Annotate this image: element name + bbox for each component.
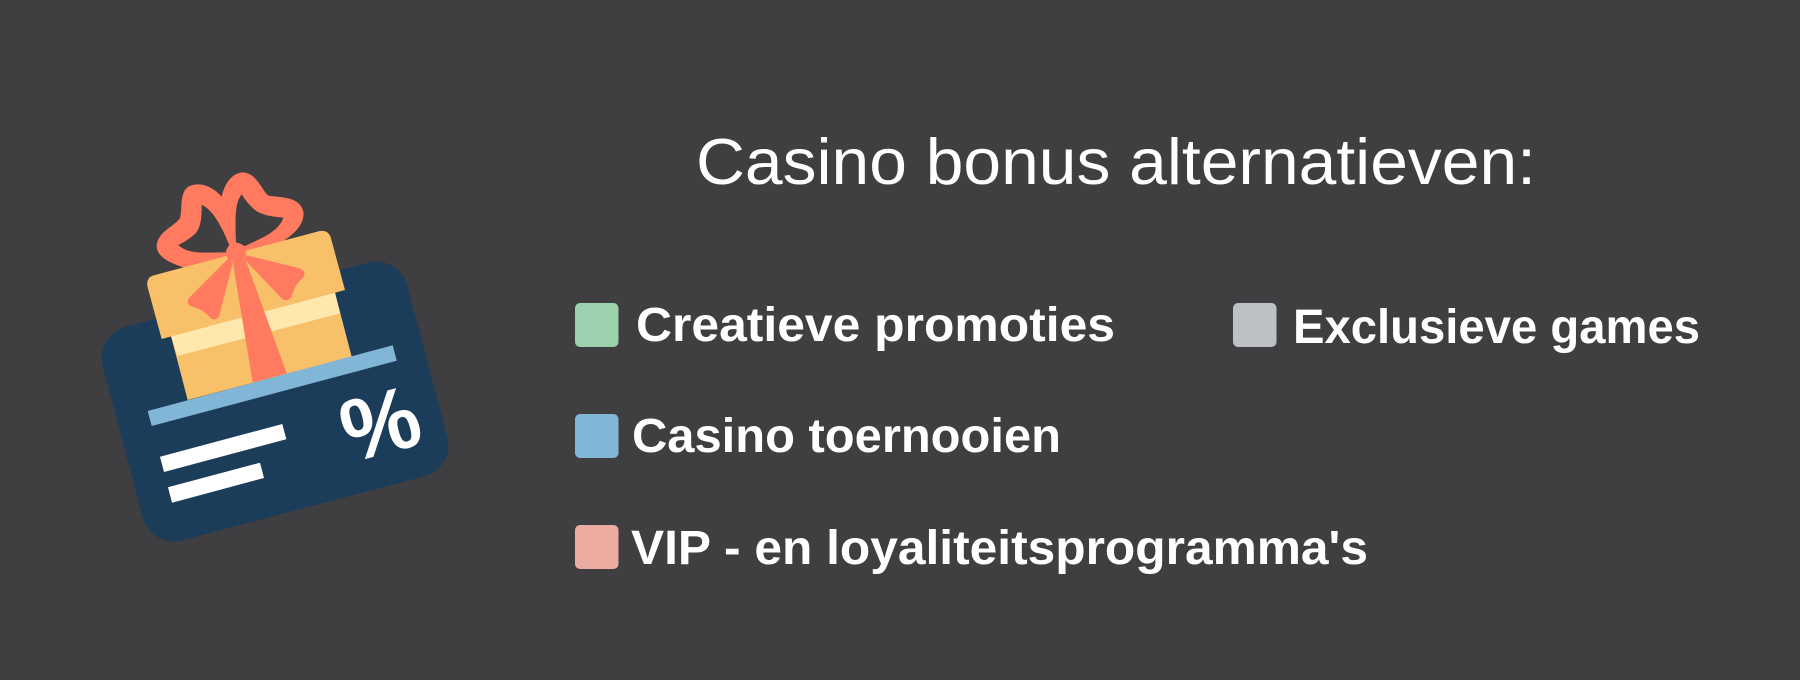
legend item: Casino toernooien: Casino toernooien xyxy=(632,410,1061,463)
icon: gift card with present xyxy=(94,172,456,549)
gift box xyxy=(147,172,352,400)
percent sign: % xyxy=(330,366,431,481)
legend item: Exclusieve games: Exclusieve games xyxy=(1293,301,1700,354)
legend item: VIP - en loyaliteitsprogramma's: VIP - en loyaliteitsprogramma's xyxy=(631,522,1368,575)
legend item: Creatieve promoties: Creatieve promoties xyxy=(636,299,1115,352)
card body xyxy=(94,254,456,549)
card text lines xyxy=(160,424,286,503)
card stripe xyxy=(148,345,397,426)
title: Casino bonus alternatieven: xyxy=(696,125,1536,198)
